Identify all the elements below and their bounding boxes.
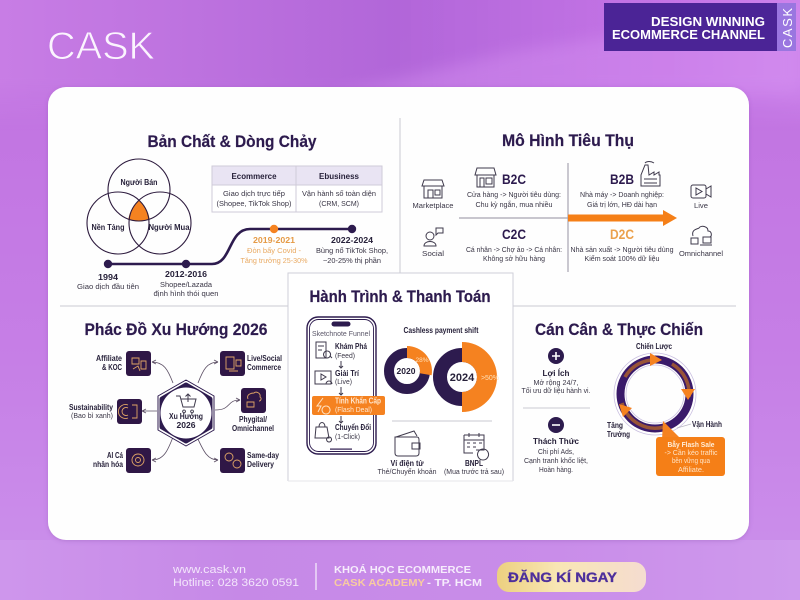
callout: Bẫy Flash Sale: bền vững qua — [672, 456, 711, 465]
benefits — [522, 348, 590, 395]
trend tile: AI Cá nhân hóa — [93, 448, 151, 473]
heading: Hành Trình & Thanh Toán — [310, 287, 490, 306]
panel: Cán Cân & Thực Chiến — [522, 320, 725, 476]
trend tile: Sustainability: Sustainability — [69, 403, 113, 412]
trend tile: Affiliate & KOC: & KOC — [102, 363, 122, 372]
donut chart 2024: 2024 — [450, 372, 475, 384]
footer course info: - TP. HCM — [427, 578, 482, 589]
quadrant: D2C: Nhà sản xuất -> Người tiêu dùng — [570, 245, 674, 254]
quadrant: C2C: Không sở hữu hàng — [483, 254, 545, 263]
payment: BNPL — [444, 459, 504, 476]
button: Đăng kí ngay — [497, 562, 646, 592]
donut chart 2020: 2020 — [397, 366, 416, 376]
donut chart 2020 — [389, 346, 432, 389]
label: Omnichannel: Omnichannel — [679, 249, 723, 258]
central hexagon: Xu Hướng 2026: 2026 — [176, 421, 196, 430]
heading: Mô Hình Tiêu Thụ — [502, 131, 634, 150]
trend tile: Live/Social Commerce — [220, 351, 282, 376]
phone funnel: Chuyển Đổi — [335, 423, 371, 432]
timeline: định hình thói quen — [154, 289, 218, 298]
header badge: ECOMMERCE CHANNEL — [612, 27, 765, 42]
heading: Cán Cân & Thực Chiến — [535, 320, 703, 339]
payment: Ví điện tử — [378, 459, 436, 476]
icon: omnichannel — [691, 226, 712, 245]
icon: calendar — [464, 433, 489, 460]
timeline: 1994 — [98, 273, 119, 282]
icon: B2C store — [475, 168, 496, 187]
phone funnel: (Flash Deal) — [335, 405, 372, 414]
main white card — [48, 87, 749, 540]
trend tile: Sustainability: (Bao bì xanh) — [71, 411, 113, 420]
label: Marketplace: Marketplace — [412, 201, 454, 210]
quadrant: C2C: Cá nhân -> Chợ ảo -> Cá nhân: — [466, 245, 562, 254]
label: Live: Live — [694, 201, 708, 210]
header badge: CASK — [780, 8, 795, 48]
donut chart 2020: 28% — [415, 357, 429, 364]
trend tile: Affiliate & KOC — [96, 351, 151, 376]
trend tile: Live/Social Commerce: Commerce — [247, 363, 281, 372]
timeline: Tăng trưởng 25-30% — [240, 256, 308, 265]
quadrant axes — [459, 163, 568, 272]
payment: BNPL: (Mua trước trả sau) — [444, 467, 504, 476]
quadrant: B2B: Nhà máy -> Doanh nghiệp: — [580, 190, 664, 199]
footer course info: CASK ACADEMY — [334, 578, 425, 589]
timeline — [77, 225, 388, 298]
callout: Bẫy Flash Sale: -> Cần kéo traffic — [664, 448, 718, 457]
venn diagram: Người Mua — [148, 223, 190, 232]
quadrant: D2C — [570, 226, 674, 263]
timeline: Đòn bẩy Covid - — [247, 246, 301, 255]
icon: wallet — [395, 431, 420, 456]
comparison table: Giao dịch trực tiếp — [223, 189, 285, 198]
quadrant: B2B: Giá trị lớn, HĐ dài hạn — [587, 200, 657, 209]
phone funnel: Khám Phá — [335, 342, 367, 351]
comparison table: Ecommerce — [232, 172, 277, 181]
phone funnel: (Live) — [335, 377, 352, 386]
panel: Hành Trình & Thanh Toán — [288, 273, 513, 481]
quadrant: C2C: C2C — [502, 226, 526, 242]
timeline: Giao dịch đầu tiên — [77, 282, 139, 291]
payment: Ví điện tử: Thẻ/Chuyển khoản — [378, 467, 436, 476]
connectors — [142, 360, 240, 462]
challenges: Cạnh tranh khốc liệt, — [524, 456, 588, 465]
timeline: 2022-2024 — [331, 236, 374, 245]
challenges — [524, 417, 588, 474]
phone funnel: (Feed) — [335, 351, 355, 360]
chart title: Cashless payment shift — [404, 326, 479, 335]
cycle diagram — [607, 342, 722, 439]
panel: Bản Chất & Dòng Chảy — [77, 132, 388, 298]
arrow: D2C shift — [568, 210, 677, 226]
quadrant: B2C — [467, 171, 561, 209]
quadrant: C2C — [466, 226, 562, 263]
challenges: Hoàn hàng. — [539, 465, 573, 474]
timeline: 2019-2021 — [253, 236, 296, 245]
payment: Ví điện tử: Ví điện tử — [390, 459, 424, 468]
trend tile: Phygital/Omnichannel — [232, 388, 274, 433]
payment: BNPL: BNPL — [465, 459, 483, 468]
donut chart 2024 — [440, 342, 499, 412]
quadrant: B2C: Cửa hàng -> Người tiêu dùng: — [467, 190, 561, 199]
quadrant: B2C: B2C — [502, 171, 526, 187]
trend tile: Same-day Delivery — [220, 448, 279, 473]
button: Đăng kí ngay: ĐĂNG KÍ NGAY — [508, 570, 617, 585]
callout: Bẫy Flash Sale: Affiliate. — [678, 465, 704, 474]
quadrant: B2B — [580, 171, 664, 209]
header badge — [604, 3, 796, 51]
phone funnel: Giải Trí — [335, 369, 360, 378]
heading: Phác Đồ Xu Hướng 2026 — [84, 320, 268, 339]
trend tile: AI Cá nhân hóa: nhân hóa — [93, 460, 123, 469]
central hexagon: Xu Hướng 2026: Xu Hướng — [169, 412, 203, 421]
timeline: ~20-25% thị phần — [323, 256, 381, 265]
cycle diagram: Vận Hành — [692, 420, 722, 429]
quadrant: B2C: Chu kỳ ngắn, mua nhiều — [476, 200, 552, 209]
benefits: Tối ưu dữ liệu hành vi. — [522, 386, 590, 395]
icon: social user — [424, 228, 443, 246]
footer contact: Hotline: 028 3620 0591 — [173, 577, 299, 589]
quadrant: D2C: Kiểm soát 100% dữ liệu — [584, 254, 660, 263]
venn diagram: Người Bán — [120, 178, 158, 187]
timeline: 2012-2016 — [165, 270, 208, 279]
callout: Bẫy Flash Sale — [656, 421, 725, 476]
icon: marketplace store — [422, 180, 444, 198]
footer course info — [334, 563, 482, 589]
cycle diagram: Tăng — [607, 421, 623, 430]
venn diagram: Nền Tảng — [92, 223, 125, 232]
quadrant: B2B: B2B — [610, 171, 634, 187]
phone funnel: Sketchnote Funnel — [312, 329, 370, 338]
timeline: Bùng nổ TikTok Shop, — [316, 246, 388, 255]
trend tile: Phygital/Omnichannel: Phygital/ — [239, 415, 268, 424]
trend tile: Sustainability — [69, 399, 142, 424]
challenges: Chi phí Ads, — [538, 447, 574, 456]
logo: CASK: CASK — [47, 25, 155, 68]
panel: Phác Đồ Xu Hướng 2026 — [69, 320, 282, 473]
comparison table: Ebusiness — [319, 172, 360, 181]
trend tile: Same-day Delivery: Same-day — [247, 451, 279, 460]
heading: Bản Chất & Dòng Chảy — [148, 132, 317, 151]
label: Social: Social — [422, 249, 444, 258]
footer course info: KHOÁ HỌC ECOMMERCE — [334, 563, 471, 576]
donut chart 2024: >50% — [481, 375, 499, 382]
cycle diagram: Trưởng — [607, 430, 630, 439]
trend tile: Phygital/Omnichannel: Omnichannel — [232, 424, 274, 433]
footer contact: www.cask.vn — [172, 564, 246, 576]
icon: factory — [641, 162, 660, 186]
venn diagram — [87, 159, 191, 254]
comparison table — [212, 166, 382, 212]
comparison table: Vận hành số toàn diện — [302, 189, 376, 198]
cycle diagram: Chiến Lược — [636, 342, 672, 351]
trend tile: Affiliate & KOC: Affiliate — [96, 354, 122, 363]
comparison table: (Shopee, TikTok Shop) — [216, 199, 292, 208]
phone funnel: Tính Khẩn Cấp — [335, 396, 381, 406]
trend tile: Live/Social Commerce: Live/Social — [247, 354, 282, 363]
footer contact — [172, 564, 299, 589]
callout: Bẫy Flash Sale: Bẫy Flash Sale — [668, 440, 714, 449]
phone funnel — [307, 317, 385, 454]
icon: live camera — [691, 185, 711, 198]
phone funnel: (1-Click) — [335, 432, 360, 441]
benefits: Lợi Ích — [542, 369, 570, 378]
panel: Mô Hình Tiêu Thụ — [412, 131, 723, 272]
trend tile: Same-day Delivery: Delivery — [247, 460, 274, 469]
quadrant: D2C: D2C — [610, 226, 634, 242]
header badge: DESIGN WINNING — [651, 14, 765, 29]
trend tile: AI Cá nhân hóa: AI Cá — [107, 451, 123, 460]
comparison table: (CRM, SCM) — [319, 199, 359, 208]
central hexagon: Xu Hướng 2026 — [158, 380, 214, 446]
challenges: Thách Thức — [533, 437, 580, 446]
benefits: Mở rộng 24/7, — [534, 378, 578, 387]
timeline: Shopee/Lazada — [160, 280, 213, 289]
